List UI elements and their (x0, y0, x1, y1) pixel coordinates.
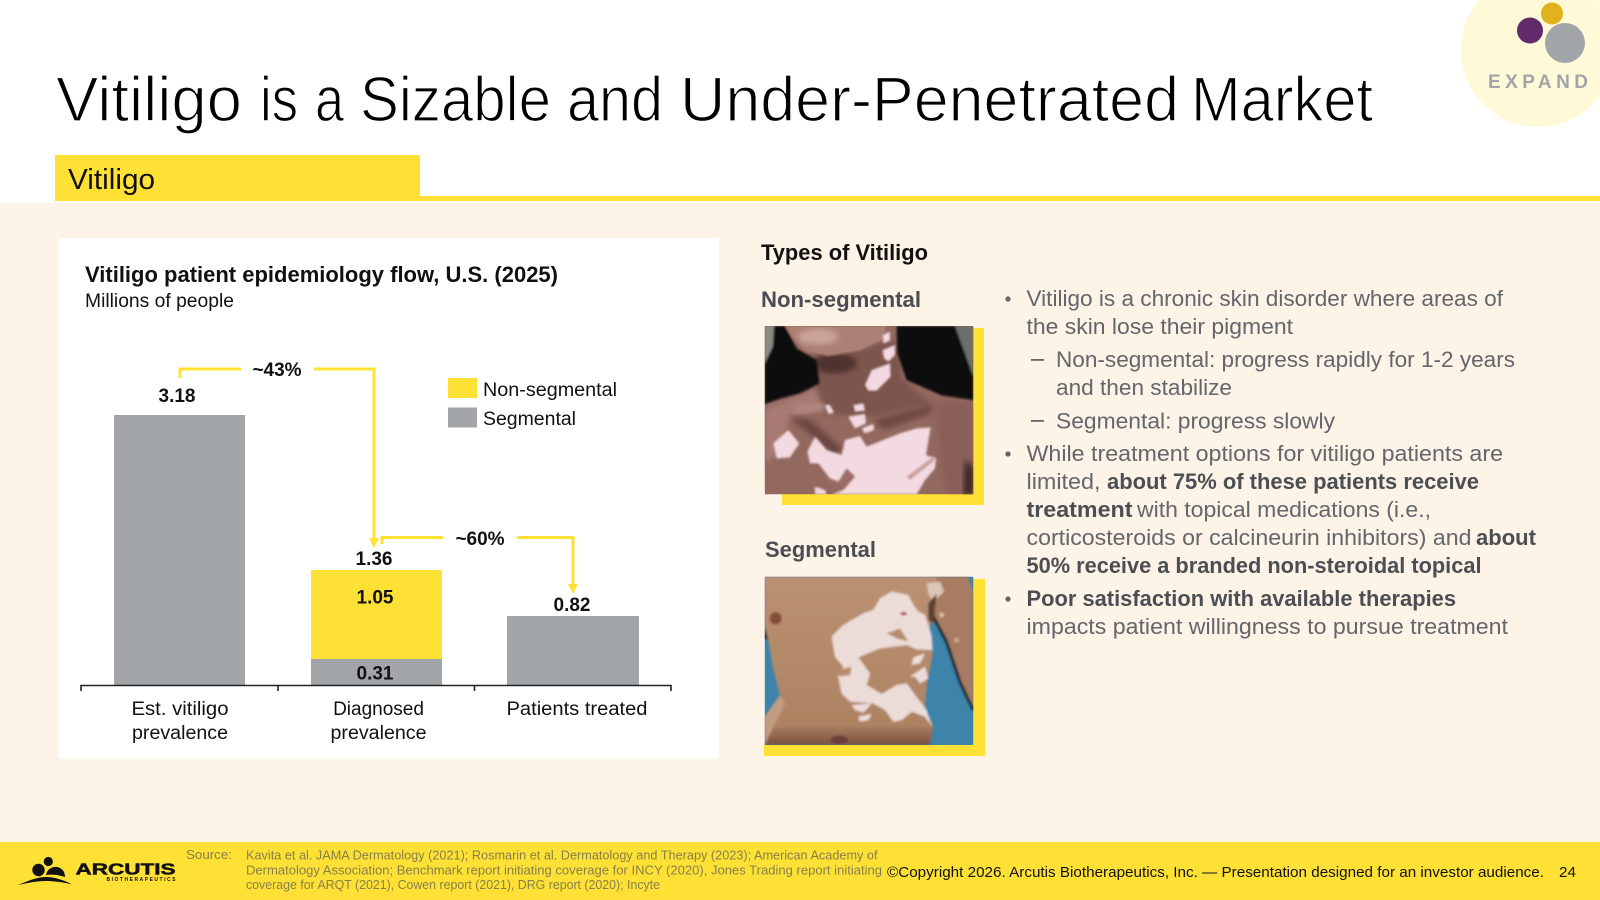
arrow: about 60 percent (382, 529, 578, 594)
bar: patients treated: 0.82 (554, 595, 590, 616)
title: Under-Penetrated (680, 65, 1179, 135)
title: Vitiligo (56, 65, 242, 135)
logo: arcutis: BIOTHERAPEUTICS (106, 877, 176, 883)
axis (81, 686, 671, 691)
bullet: treatment options: While treatment options for vitiligo patients are (1026, 441, 1503, 466)
bullet: chronic skin disorder: the skin lose their pigment (1026, 314, 1293, 339)
category labels (132, 699, 648, 744)
section tab: vitiligo (55, 155, 1600, 201)
bullet: poor satisfaction: Poor satisfaction with available therapies (1026, 586, 1456, 611)
category labels: Patients treated (506, 699, 648, 720)
bullet: treatment options: limited, (1026, 469, 1100, 494)
bullet: treatment options (1005, 441, 1537, 578)
bullet: treatment options: about 75% of these patients receive (1107, 469, 1479, 494)
label: segmental: Segmental (765, 537, 876, 562)
chart title: Vitiligo patient epidemiology flow, U.S. (2025) (85, 262, 558, 287)
title: Sizable (360, 65, 551, 135)
chart subtitle: Millions of people (85, 291, 234, 312)
source text (246, 848, 882, 892)
badge: expand (1461, 0, 1600, 127)
copyright: ©Copyright 2026. Arcutis Biotherapeutics, Inc. — Presentation designed for an investor audience. (887, 864, 1544, 881)
bar: diagnosed prevalence: 1.36 (356, 549, 392, 570)
page number: 24 (1559, 864, 1576, 881)
arrow: about 43 percent: ~43% (252, 360, 302, 381)
legend: Non-segmental (483, 380, 617, 401)
category labels: Est. vitiligo (132, 699, 228, 720)
bullet: chronic skin disorder: Vitiligo is a chronic skin disorder where areas of (1026, 286, 1504, 311)
source label: Source: (186, 848, 232, 862)
category labels: prevalence (330, 723, 426, 744)
bullet: treatment options: 50% receive a branded non-steroidal topical (1026, 553, 1482, 578)
bar: diagnosed prevalence (311, 549, 442, 685)
footer (0, 842, 1600, 900)
title: a (315, 65, 345, 135)
bullet: treatment options: corticosteroids or calcineurin inhibitors) and (1026, 525, 1472, 550)
title: and (567, 65, 663, 135)
badge: expand: EXPAND (1488, 72, 1588, 93)
category labels: Diagnosed (333, 699, 424, 720)
photo: non-segmental vitiligo (765, 326, 984, 505)
bullet: treatment options: treatment (1026, 497, 1133, 522)
bullet: treatment options: about (1476, 525, 1537, 550)
bar: est. vitiligo prevalence (114, 386, 245, 685)
sub-bullet: non-segmental: Non-segmental: progress rapidly for 1-2 years (1056, 347, 1515, 372)
sub-bullet: segmental: Segmental: progress slowly (1056, 408, 1335, 434)
panel: epidemiology chart (59, 238, 719, 759)
category labels: prevalence (132, 723, 228, 744)
bullet: treatment options: with topical medications (i.e., (1136, 497, 1431, 522)
bar: patients treated (507, 595, 639, 685)
source text: coverage for ARQT (2021), Cowen report (2021), DRG report (2020); Incyte (246, 878, 660, 892)
sub-bullet: non-segmental: and then stabilize (1056, 375, 1232, 400)
legend: Segmental (483, 409, 576, 430)
title: is (260, 65, 298, 135)
source text: Dermatology Association; Benchmark report initiating coverage for INCY (2020), Jones Trading report initiating (246, 864, 882, 878)
bar: diagnosed prevalence: 1.05 (357, 588, 394, 608)
arrow: about 43 percent (180, 360, 379, 548)
photo: segmental vitiligo (764, 577, 985, 756)
logo: arcutis (18, 857, 176, 885)
bar: est. vitiligo prevalence: 3.18 (159, 386, 195, 407)
bullet: chronic skin disorder (1005, 286, 1504, 339)
title (56, 65, 1373, 135)
bullet: poor satisfaction (1005, 586, 1508, 639)
label: non-segmental: Non-segmental (761, 287, 921, 312)
section tab: vitiligo: Vitiligo (68, 164, 155, 196)
title: Market (1191, 65, 1373, 135)
logo: arcutis: ARCUTIS (76, 862, 176, 878)
heading: types of vitiligo: Types of Vitiligo (761, 240, 928, 265)
sub-bullet: non-segmental (1031, 347, 1515, 400)
legend (448, 378, 617, 430)
source text: Kavita et al. JAMA Dermatology (2021); Rosmarin et al. Dermatology and Therapy (2023); American Academy of (246, 848, 878, 862)
bullet list (1005, 286, 1537, 639)
bar: diagnosed prevalence: 0.31 (357, 664, 394, 684)
bullet: poor satisfaction: impacts patient willingness to pursue treatment (1026, 614, 1508, 639)
arrow: about 60 percent: ~60% (455, 529, 505, 550)
